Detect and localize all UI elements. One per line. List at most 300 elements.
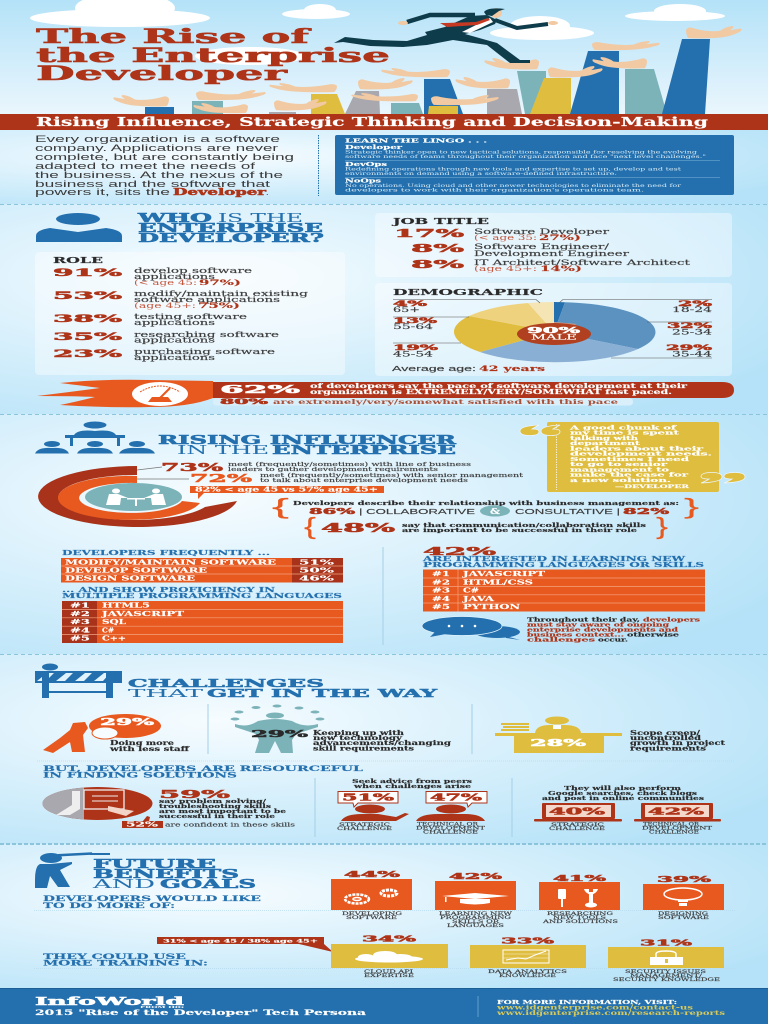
stat: 59% problem solving: troubleshooting skills [159, 804, 272, 810]
intro paragraph: company. Applications are never [35, 143, 278, 153]
InfoWorld logo: FROM IDG [140, 1006, 184, 1009]
panel: job title: Software Developer [474, 228, 610, 236]
heading: they could use more training in: MORE TRAINING IN: [43, 958, 208, 968]
card: learning new programming skills 42%: PROGRAMMING [440, 915, 511, 921]
table: languages of interest: #5 [432, 604, 450, 611]
challenge: scope creep: Scope creep/ [630, 730, 701, 737]
table: developers frequently: MODIFY/MAINTAIN SOFTWARE [65, 560, 277, 566]
table: languages of interest: JAVASCRIPT [461, 571, 546, 578]
quote card: make the case for [570, 472, 690, 478]
panel: demographic [375, 283, 732, 376]
panel: learn the lingo: Strategic thinker open to new tactical solutions, responsible for resolving the evolving [345, 150, 697, 156]
quote card: development needs. [570, 452, 712, 458]
heading: challenges that get in the way: CHALLENGES [128, 676, 324, 690]
panel: role: (< age 45: [134, 279, 197, 287]
icon: people at a table [35, 422, 155, 454]
table: programming language proficiency: MULTIPLE PROGRAMMING LANGUAGES [62, 593, 342, 600]
group: seek advice from peers: TECHNICAL OR [417, 822, 478, 828]
card: learning new programming skills 42%: SKILLS OR [452, 919, 499, 925]
stat: 59% problem solving: are most important to be [159, 809, 286, 815]
panel: role: 38% [53, 314, 123, 325]
subtitle band: Rising Influence, Strategic Thinking and Decision-Making [36, 115, 709, 129]
card: data analytics knowledge 33% [470, 936, 586, 979]
group: online communities: CHALLENGE [549, 826, 606, 832]
heading: challenges that get in the way [128, 676, 439, 700]
card: researching tools 41%: 41% [553, 873, 607, 883]
table: programming language proficiency: C++ [102, 636, 126, 642]
card: cloud api expertise 34%: EXPERTISE [364, 973, 415, 979]
callout: pace of development [37, 380, 734, 407]
panel: role: 53% [53, 291, 123, 302]
contact links: www.idgenterprise.com/research-reports [495, 1010, 726, 1017]
group: seek advice from peers: 51% [342, 794, 395, 804]
panel: demographic: 65+ [393, 306, 420, 314]
panel: demographic: 35-44 [672, 350, 713, 358]
panel: demographic: 29% [666, 343, 712, 352]
panel: demographic: 42 years [479, 364, 545, 373]
card: learning new programming skills 42%: LEARNING NEW [439, 911, 513, 917]
intro paragraph: Developer [173, 188, 266, 198]
heading: future benefits and goals: FUTURE [93, 857, 216, 871]
table: programming language proficiency: #2 [70, 611, 90, 618]
clouds [30, 0, 725, 65]
stat: 72% senior management: to talk about enterprise development needs [260, 478, 468, 484]
heading: rising influencer in the enterprise: IN THE [177, 443, 269, 457]
text: stay aware of enterprise context: otherwise [627, 632, 680, 638]
quote card: A good chunk of [568, 426, 677, 432]
challenge: keeping up with technology: new technology [313, 735, 403, 742]
heading: future benefits and goals: GOALS [160, 877, 256, 891]
table: programming language proficiency: C# [102, 628, 114, 634]
card: learning new programming skills 42%: LANGUAGES [447, 923, 505, 929]
stat: 52% confident thumbs up: are confident in these skills [165, 822, 295, 828]
panel: learn the lingo: No operations. Using cloud and other newer technologies to eliminate the need for [345, 183, 682, 189]
stat: 73% line of business [161, 461, 471, 474]
icon: line chart [503, 950, 549, 963]
challenge: scope creep: requirements [630, 746, 707, 752]
footer: 2015 "Rise of the Developer" Tech Persona [35, 1008, 367, 1017]
card: security knowledge 31%: MANAGEMENT/ [630, 973, 703, 979]
table: languages of interest: C# [463, 588, 479, 595]
panel: learn the lingo: developers to work with their organization's operations team. [345, 188, 645, 194]
heading: resourceful developers: IN FINDING SOLUTIONS [43, 770, 237, 780]
quote card: Sometimes I need [570, 457, 689, 463]
callout: relationship with business management: 82% [623, 506, 670, 516]
group: seek advice from peers: when challenges arise [352, 784, 472, 790]
intro paragraph: powers it, sits the [35, 187, 170, 197]
card: developing software 44% [331, 869, 412, 921]
panel: demographic: Average age: [392, 364, 476, 373]
card: security knowledge 31%: SECURITY KNOWLEDGE [613, 977, 721, 983]
subtitle band [0, 114, 768, 130]
panel: role: testing software [134, 313, 247, 321]
challenge: doing more with less staff [43, 714, 191, 753]
table: developers frequently: DEVELOP SOFTWARE [65, 568, 208, 574]
icon: screwdriver and wrench [558, 889, 598, 908]
panel: role: 75%) [198, 301, 240, 310]
arms rising illustration [113, 26, 742, 114]
heading: resourceful developers: BUT, DEVELOPERS ARE RESOURCEFUL [43, 764, 363, 773]
table: languages of interest: ARE INTERESTED IN LEARNING NEW [421, 556, 686, 563]
stat: 72% senior management: meet (frequently/sometimes) with senior management [260, 472, 524, 479]
group: seek advice from peers: STRATEGIC [339, 822, 390, 828]
intro paragraph [35, 134, 294, 198]
table: programming language proficiency: HTML5 [102, 602, 150, 610]
table: developers frequently: DESIGN SOFTWARE [65, 576, 196, 582]
panel: role [35, 252, 345, 375]
heading: future benefits and goals: BENEFITS [93, 867, 239, 881]
stat: 72% senior management: 72% [190, 472, 253, 485]
heading: rising influencer in the enterprise [158, 433, 458, 457]
panel: role: applications [134, 319, 216, 327]
heading: resourceful developers [43, 764, 363, 780]
panel: demographic: 19% [393, 343, 438, 352]
callout: relationship with business management [272, 494, 699, 519]
quote card: management to [570, 467, 669, 473]
callout: relationship with business management: } [684, 494, 699, 519]
heading: rising influencer in the enterprise: ENTERPRISE [272, 443, 456, 457]
panel: role: (age 45+: [134, 302, 196, 310]
heading: who is the enterprise developer: WHO [136, 211, 212, 225]
card: cloud api expertise 34%: 34% [362, 934, 417, 944]
panel: learn the lingo [335, 135, 734, 195]
icon: developer silhouette [36, 213, 122, 242]
pie chart: age groups [454, 302, 655, 362]
text: stay aware of enterprise context: Throughout their day, [527, 618, 640, 624]
group: seek advice from peers: 47% [430, 794, 483, 804]
intro paragraph: adapted to meet the needs of [35, 161, 256, 171]
heading: developers would like to do more of: DEVELOPERS WOULD LIKE [43, 894, 261, 903]
group: online communities: 40% [549, 808, 606, 818]
panel: job title: Development Engineer [474, 250, 630, 258]
panel: learn the lingo: Redefining operations through new tools and expertise to set up, develop and test [345, 166, 681, 172]
heading: future benefits and goals [91, 857, 256, 891]
icon: light bulb [664, 888, 702, 906]
challenge: keeping up with technology: Keeping up with [313, 730, 405, 737]
quote card: talking with [570, 436, 639, 442]
text: stay aware of enterprise context: must stay aware of ongoing [527, 622, 669, 628]
card: designing software 39%: SOFTWARE [658, 915, 710, 921]
panel: job title: JOB TITLE [391, 216, 489, 226]
callout: communication skills 48%: 48% [321, 521, 397, 535]
panel: learn the lingo: DevOps [345, 162, 387, 168]
stat: 72% senior management [190, 472, 524, 485]
table: programming language proficiency: #1 [70, 602, 90, 610]
card: learning new programming skills 42%: 42% [449, 871, 503, 881]
callout: communication skills 48%: } [656, 513, 668, 539]
table: languages of interest: #3 [432, 588, 450, 595]
footer [0, 988, 768, 1024]
heading: challenges that get in the way: THAT [128, 686, 204, 700]
group: online communities: STRATEGIC [551, 822, 604, 828]
panel: role: researching software [134, 331, 279, 339]
panel: job title [375, 213, 732, 277]
running businessman illustration [334, 8, 558, 63]
table: developers frequently [61, 550, 343, 582]
group: online communities [534, 786, 721, 836]
panel: role: 35% [53, 332, 123, 343]
panel: role: 97%) [199, 278, 241, 287]
stat: 52% confident thumbs up [122, 816, 295, 828]
callout: pace of development: 62% [220, 383, 302, 396]
table: programming language proficiency: #3 [70, 619, 90, 626]
stat: 52% confident thumbs up: 52% [126, 822, 159, 828]
quote card [547, 422, 719, 492]
icon: opening quote mark [520, 425, 560, 436]
table: developers frequently: DEVELOPERS FREQUENTLY ... [62, 550, 270, 557]
stat: 73% line of business: leaders to gather development requirements [228, 467, 438, 473]
card: researching tools 41%: RESEARCHING [547, 911, 613, 917]
callout: cloud age split tag [157, 937, 333, 952]
panel: job title: (age 45+: [474, 265, 537, 273]
title: Developer [36, 61, 288, 85]
heading: they could use more training in [43, 952, 208, 968]
quote card: —DEVELOPER [615, 484, 691, 490]
panel: learn the lingo: Developer [345, 145, 402, 151]
card: cloud api expertise 34% [331, 934, 448, 979]
card: developing software 44%: 44% [344, 869, 401, 879]
stat: 59% problem solving [159, 788, 286, 820]
heading: developers would like to do more of [43, 894, 261, 910]
panel: role: 91% [53, 268, 123, 279]
panel: role: applications [134, 273, 216, 281]
panel: learn the lingo: environments on demand using a software-defined infrastructure. [345, 171, 618, 177]
challenge: keeping up with technology: advancements/changing [313, 740, 452, 747]
challenge: keeping up with technology [230, 704, 452, 753]
intro paragraph: business and the software that [35, 179, 271, 189]
icon: gears [345, 890, 397, 904]
panel: job title: IT Architect/Software Architect [474, 259, 690, 267]
callout: relationship with business management: 86% [309, 506, 356, 516]
callout: pace of development: are extremely/very/somewhat satisfied with this pace [273, 399, 618, 406]
panel: job title: 17% [394, 227, 465, 240]
heading: developers would like to do more of: TO DO MORE OF: [43, 901, 175, 910]
text: stay aware of enterprise context: occur. [598, 638, 628, 644]
table: languages of interest [421, 545, 705, 612]
callout: communication skills 48%: are important to be successful in their role [402, 528, 638, 534]
panel: job title: 8% [411, 258, 466, 271]
panel: role: applications [134, 336, 216, 344]
card: security knowledge 31%: SECURITY ISSUES [625, 969, 707, 975]
text: stay aware of enterprise context: enterprise developments and [527, 628, 678, 634]
panel: demographic: 55-64 [393, 323, 434, 331]
card: learning new programming skills 42% [435, 871, 516, 929]
callout: pace of development: organization is EXTREMELY/VERY/SOMEWHAT fast paced. [310, 389, 672, 396]
panel: demographic: 13% [393, 316, 437, 325]
group: online communities: CHALLENGE [649, 830, 700, 836]
panel: demographic: 25-34 [672, 328, 713, 336]
group: seek advice from peers: CHALLENGE [423, 830, 479, 836]
icon: cloud [355, 951, 423, 962]
panel: demographic: 2% [678, 299, 712, 308]
challenge: doing more with less staff: 29% [100, 718, 155, 728]
intro paragraph: . [266, 187, 269, 197]
table: languages of interest: PROGRAMMING LANGUAGES OR SKILLS [423, 562, 704, 569]
quote card: department [570, 441, 641, 447]
card: security knowledge 31% [608, 938, 724, 983]
card: data analytics knowledge 33%: DATA ANALYTICS [488, 969, 568, 975]
panel: job title: 14%) [540, 264, 582, 273]
intro paragraph: complete, but are constantly being [35, 152, 294, 162]
card: security knowledge 31%: 31% [640, 938, 693, 948]
panel: role: modify/maintain existing [134, 290, 309, 298]
panel: role: software applications [134, 296, 281, 304]
card: researching tools 41%: AND SOLUTIONS [541, 919, 619, 925]
panel: demographic: DEMOGRAPHIC [393, 287, 543, 297]
challenge: scope creep: 28% [530, 739, 587, 749]
icon: closing quote mark [701, 472, 745, 483]
InfoWorld logo: InfoWorld [35, 995, 185, 1008]
heading: rising influencer in the enterprise: RISING INFLUENCER [158, 433, 458, 447]
group: online communities: TECHNICAL OR [643, 822, 699, 828]
contact links: FOR MORE INFORMATION, VISIT: [497, 1000, 677, 1006]
panel: job title: 8% [411, 242, 466, 255]
group: seek advice from peers: DEVELOPMENT [416, 826, 486, 832]
panel: role: purchasing software [134, 348, 275, 356]
group: online communities: They will also perform [564, 786, 681, 792]
callout: age split tag: 82% < age 45 vs 57% age 45+ [195, 486, 378, 494]
group: online communities: 42% [648, 808, 705, 818]
contact links [495, 1000, 726, 1017]
callout: relationship with business management: Developers describe their relationship with business management as: [293, 501, 679, 507]
text: stay aware of enterprise context: developers [643, 618, 700, 624]
group: seek advice from peers [337, 779, 487, 836]
table: languages of interest: PYTHON [463, 604, 521, 611]
callout: communication skills 48%: { [304, 513, 316, 539]
heading: who is the enterprise developer [136, 211, 324, 245]
callout: relationship with business management: | COLLABORATIVE [359, 507, 475, 516]
quote card: to go to senior [570, 462, 669, 468]
stat: 73% line of business: 73% [161, 461, 224, 474]
icon: padlock [650, 951, 683, 965]
InfoWorld logo [35, 995, 185, 1009]
icon: troubleshooting clipboard circle [42, 787, 152, 820]
chart: concentric meeting rings 73% and 72% [38, 466, 237, 527]
card: designing software 39%: 39% [657, 874, 712, 884]
table: languages of interest: #4 [432, 596, 450, 603]
callout: relationship with business management: { [272, 494, 289, 519]
heading: who is the enterprise developer: IS THE [218, 211, 303, 225]
heading: who is the enterprise developer: DEVELOPER? [138, 231, 324, 245]
group: seek advice from peers: Seek advice from peers [352, 779, 473, 785]
intro paragraph: the business. At the nexus of the [35, 170, 283, 180]
quote card: leaders about their [570, 446, 705, 452]
group: seek advice from peers: CHALLENGE [337, 826, 393, 832]
quote card: a new solution. [570, 478, 671, 484]
panel: learn the lingo: LEARN THE LINGO . . . [345, 138, 487, 144]
challenge: doing more with less staff: Doing more [110, 740, 174, 747]
card: data analytics knowledge 33%: 33% [501, 936, 555, 946]
text: stay aware of enterprise context: challenges [527, 638, 595, 644]
heading: future benefits and goals: AND [91, 877, 155, 891]
intro paragraph: Every organization is a software [35, 134, 280, 144]
heading: challenges that get in the way: GET IN THE WAY [207, 686, 439, 700]
challenge: scope creep: growth in project [630, 740, 725, 747]
icon: person with telescope [35, 852, 110, 888]
panel: demographic: 4% [393, 299, 427, 308]
header sky background [0, 0, 768, 114]
challenge: scope creep [495, 716, 725, 753]
callout: pace of development: 80% [220, 397, 269, 406]
callout: relationship with business management: & [490, 506, 501, 516]
table: programming language proficiency: JAVASCRIPT [100, 611, 185, 618]
callout: age split tag [190, 486, 384, 499]
callout: relationship with business management: CONSULTATIVE | [515, 507, 620, 516]
card: cloud api expertise 34%: CLOUD API [364, 969, 413, 975]
group: online communities: and post in online communities [542, 796, 705, 802]
icon: graduation cap [442, 893, 509, 904]
callout: cloud age split tag: 31% < age 45 / 38% age 45+ [163, 938, 318, 944]
table: programming language proficiency: SQL [102, 619, 127, 626]
table: developers frequently: 51% [299, 560, 335, 566]
title: The Rise of [36, 24, 312, 48]
icon: road barrier [35, 664, 122, 698]
stat: 59% problem solving: 59% [159, 788, 231, 801]
challenge: scope creep: uncontrolled [630, 735, 702, 742]
challenge: doing more with less staff: with less staff [108, 746, 191, 753]
pie chart: age groups: 90% [527, 325, 581, 335]
icon: flaming speedometer [37, 380, 213, 407]
stat: 59% problem solving: say problem solving/ [159, 799, 267, 805]
stat: 59% problem solving: successful in their role [159, 814, 275, 820]
table: languages of interest: #1 [432, 571, 450, 578]
pie chart: age groups: MALE [531, 334, 577, 342]
icon: two people meeting [106, 488, 166, 506]
card: researching tools 41%: NEW TOOLS [553, 915, 607, 921]
title [36, 24, 390, 85]
text: stay aware of enterprise context: business context... [527, 632, 624, 638]
text: stay aware of enterprise context [527, 618, 700, 644]
icon: speech bubbles [422, 616, 520, 640]
panel: role: ROLE [53, 255, 103, 265]
panel: demographic: 32% [667, 321, 712, 330]
quote card: my time is spent [570, 431, 680, 437]
table: languages of interest: JAVA [461, 596, 495, 603]
table: languages of interest: HTML/CSS [463, 579, 533, 586]
card: developing software 44%: SOFTWARE [346, 915, 398, 921]
card: designing software 39%: DESIGNING [658, 911, 708, 917]
panel: role: develop software [134, 267, 252, 275]
table: programming language proficiency: #4 [70, 628, 90, 634]
callout: communication skills 48%: say that communication/collaboration skills [402, 523, 647, 529]
panel: learn the lingo: software needs of teams throughout their organization and face "next level challenges." [345, 154, 706, 160]
table: developers frequently: 50% [299, 568, 335, 574]
panel: job title: (< age 35: [474, 234, 537, 242]
table: developers frequently: 46% [299, 576, 335, 582]
table: programming language proficiency: #5 [70, 636, 90, 642]
panel: learn the lingo: NoOps [345, 178, 381, 184]
panel: job title: Software Engineer/ [474, 243, 610, 251]
table: languages of interest: 42% [423, 545, 498, 558]
table: languages of interest: #2 [432, 579, 450, 586]
group: online communities: Google searches, check blogs [548, 791, 698, 797]
challenge: keeping up with technology: skill requirements [313, 746, 415, 752]
challenge: keeping up with technology: 29% [251, 730, 309, 740]
card: designing software 39% [643, 874, 724, 921]
panel: role: applications [134, 354, 216, 362]
table: programming language proficiency [62, 587, 343, 643]
stat: 73% line of business: meet (frequently/sometimes) with line of business [228, 461, 471, 468]
heading: they could use more training in: THEY COULD USE [43, 952, 186, 961]
callout: communication skills 48% [304, 513, 668, 539]
heading: who is the enterprise developer: ENTERPRISE [138, 221, 323, 235]
panel: job title: 27%) [539, 233, 581, 242]
title: the Enterprise [36, 43, 390, 67]
group: online communities: DEVELOPMENT [642, 826, 713, 832]
table: programming language proficiency: ... AND SHOW PROFICIENCY IN [62, 587, 276, 594]
card: researching tools 41% [539, 873, 620, 925]
panel: demographic: 18-24 [672, 306, 713, 314]
